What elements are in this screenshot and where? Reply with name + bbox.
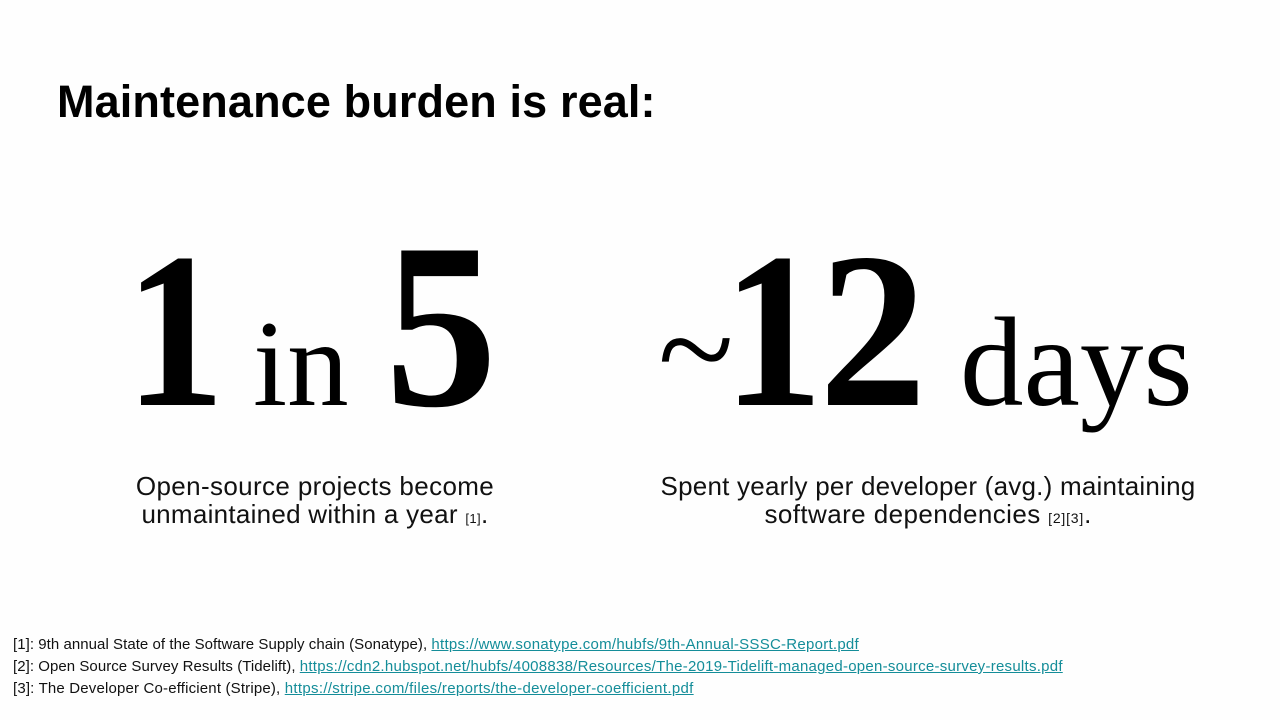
stat: 1 in 5: 1 (125, 207, 225, 453)
stat: ~12 days: 2 (819, 208, 927, 454)
caption: 12 days: Spent yearly per developer (avg.) maintaining (660, 471, 1195, 501)
stat: 1 in 5: in (253, 295, 349, 432)
title: Maintenance burden is real: (57, 76, 656, 127)
stat: 1 in 5: 5 (385, 195, 497, 456)
reference 2: [2]: Open Source Survey Results (Tidelift), https://cdn2.hubspot.net/hubfs/4008838/Resources/The-2019-Tidelift-managed-open-source-survey-results.pdf (13, 658, 1063, 675)
caption: 1 in 5: Open-source projects become (136, 471, 494, 501)
stat: ~12 days: ~ (658, 272, 734, 427)
caption: 1 in 5: unmaintained within a year [1]. (141, 499, 489, 529)
stat: ~12 days (658, 207, 1193, 454)
caption: 12 days (660, 471, 1195, 529)
caption: 12 days: software dependencies [2][3]. (764, 499, 1092, 529)
reference 1: [1]: 9th annual State of the Software Supply chain (Sonatype), https://www.sonatype.com/hubfs/9th-Annual-SSSC-Report.pdf (13, 636, 859, 653)
stat: ~12 days: 1 (723, 207, 823, 453)
stat: ~12 days: days (960, 293, 1193, 433)
reference 3: [3]: The Developer Co-efficient (Stripe), https://stripe.com/files/reports/the-developer-coefficient.pdf (13, 680, 694, 697)
caption: 1 in 5 (136, 471, 494, 529)
stat: 1 in 5 (125, 195, 497, 456)
